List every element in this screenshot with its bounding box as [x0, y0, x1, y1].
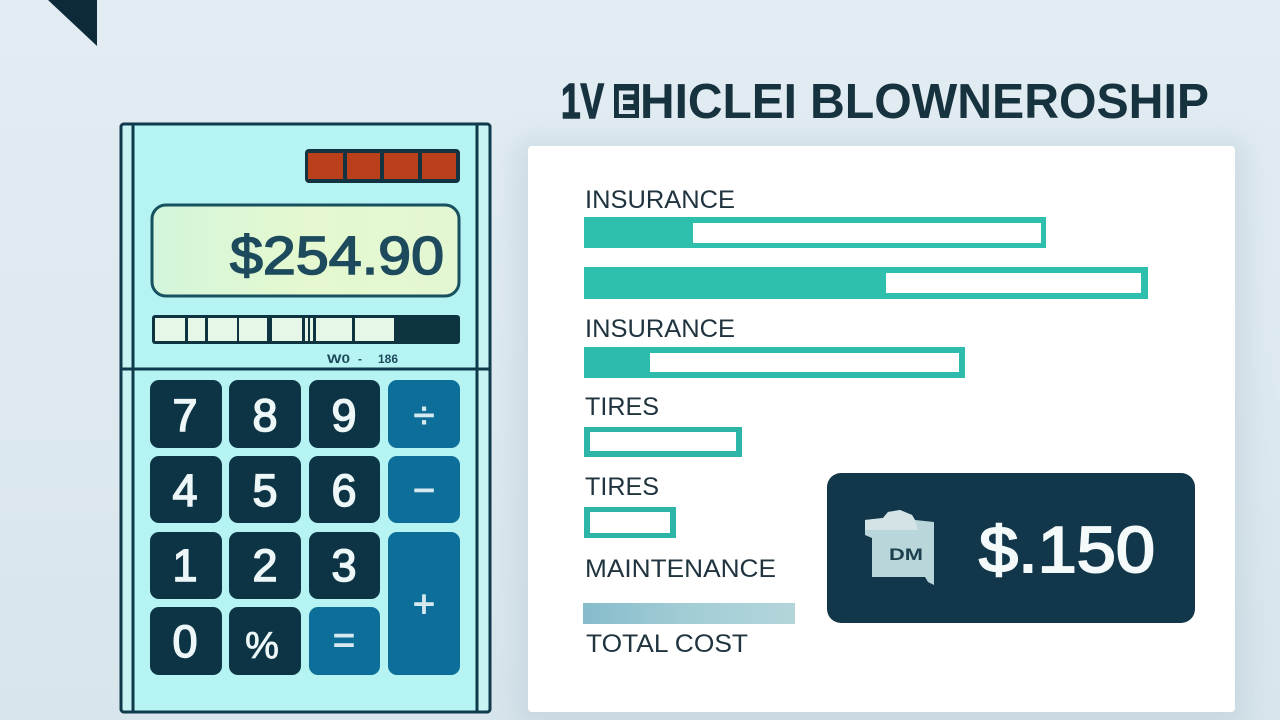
title — [561, 75, 1209, 129]
key digits — [172, 390, 357, 667]
bar: tires 1: TIRES — [585, 393, 659, 421]
operator symbols: ÷ — [414, 395, 434, 437]
bar: insurance 2: INSURANCE — [585, 315, 735, 343]
bar: insurance 1: INSURANCE — [585, 186, 735, 214]
red indicator — [305, 149, 460, 183]
key digits: 2 — [252, 540, 278, 591]
key digits: 4 — [172, 465, 198, 516]
key digits: 8 — [252, 390, 278, 441]
display: $254.90 — [230, 226, 444, 286]
title: BLOWNEROSHIP — [810, 75, 1209, 129]
bar: tires 2 — [584, 473, 676, 538]
title: E — [617, 84, 636, 122]
corner triangle — [48, 0, 97, 46]
key digits: 7 — [172, 390, 198, 441]
panel: cost breakdown — [516, 140, 1246, 720]
calculator — [121, 124, 490, 712]
key digits: 6 — [331, 465, 357, 516]
key digits: 3 — [331, 540, 357, 591]
bar: insurance 1 — [584, 186, 1046, 248]
number keys — [150, 380, 380, 675]
barcode strip — [152, 315, 460, 344]
operator keys — [309, 380, 460, 675]
key digits: 0 — [172, 616, 198, 667]
bar: maintenance: MAINTENANCE — [585, 555, 776, 583]
bar: tires 1 — [584, 393, 742, 457]
key digits: 9 — [331, 390, 357, 441]
key digits: 1 — [172, 540, 198, 591]
key digits: % — [245, 625, 279, 667]
operator symbols — [333, 395, 435, 662]
operator symbols: − — [413, 470, 435, 512]
small strip caption: W0 — [327, 352, 350, 366]
bar: unlabelled — [584, 267, 1148, 299]
small strip caption — [327, 352, 398, 366]
key digits: 5 — [252, 465, 278, 516]
calculator body — [121, 124, 490, 712]
total cost card — [827, 473, 1195, 623]
operator symbols: = — [333, 620, 355, 662]
small strip caption: - — [358, 352, 362, 366]
icon: document — [865, 510, 934, 585]
bar: insurance 2 — [584, 315, 965, 378]
icon: document: DM — [889, 545, 923, 564]
operator symbols: + — [413, 584, 435, 626]
total value: $.150 — [979, 513, 1155, 586]
keypad — [150, 380, 460, 675]
small strip caption: 186 — [378, 352, 398, 366]
bar: tires 2: TIRES — [585, 473, 659, 501]
title: 1V — [561, 75, 604, 129]
title: HICLEI — [640, 75, 797, 129]
display — [152, 205, 459, 296]
total cost label: TOTAL COST — [586, 630, 748, 658]
bar: maintenance — [583, 555, 795, 624]
